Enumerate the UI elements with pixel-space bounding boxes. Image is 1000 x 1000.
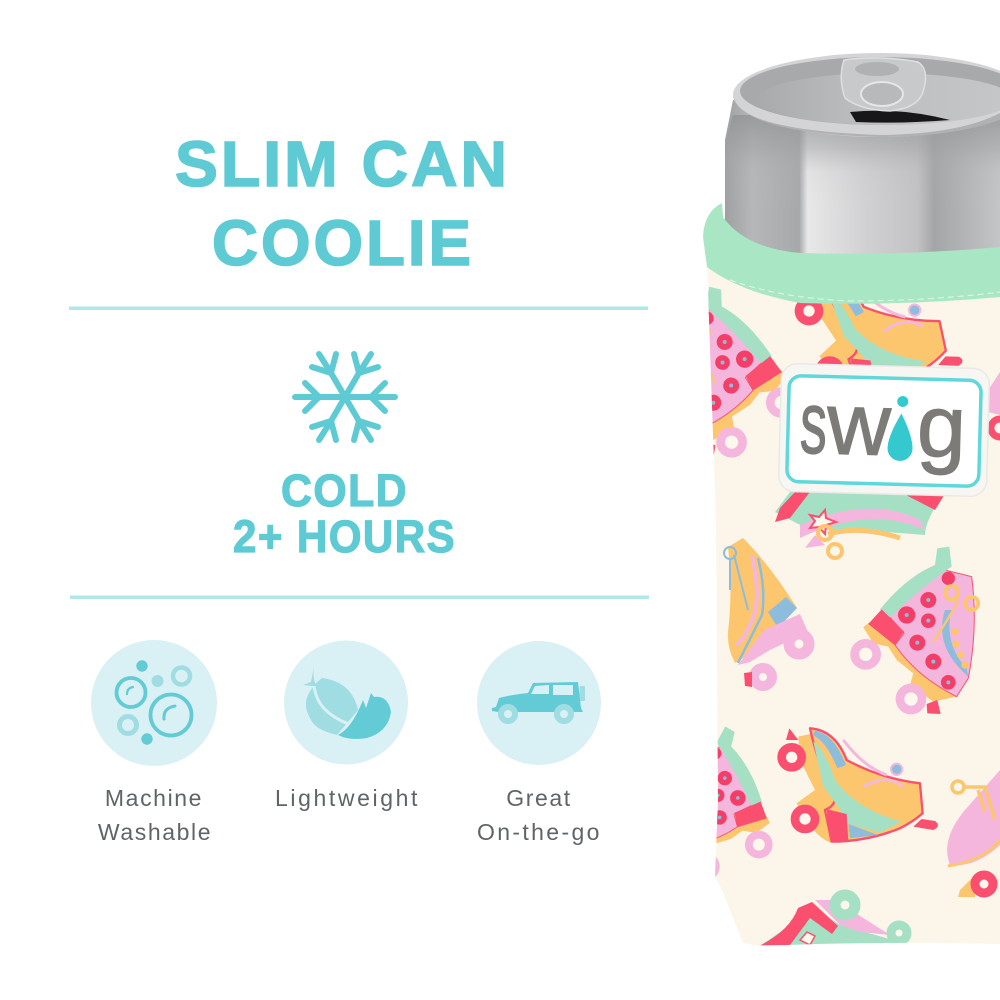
- title: SLIM CAN: [175, 128, 510, 200]
- logo wordmark: w ig: [825, 374, 967, 476]
- green collar: [703, 203, 1000, 304]
- skate: right flower: [855, 547, 978, 714]
- pull tab: [841, 58, 926, 111]
- cold duration text: COLD: [281, 465, 408, 516]
- feature: lightweight: [275, 640, 419, 811]
- logo drop: [887, 396, 914, 461]
- skate: left flower bottom: [715, 726, 773, 877]
- roller skate pattern: [708, 286, 1000, 946]
- cold duration text: [233, 465, 456, 562]
- label: Lightweight: [275, 785, 419, 811]
- swig logo patch: [778, 363, 990, 497]
- logo wordmark: s: [799, 373, 828, 472]
- icon: feather: [284, 640, 408, 764]
- skate: left yellow: [724, 538, 809, 687]
- skate: under patch rainbow: [775, 492, 945, 558]
- skate: right edge behind patch: [988, 372, 1000, 440]
- skate: right edge lower: [947, 765, 1000, 897]
- product: slim can with coolie: [703, 53, 1000, 946]
- title: COOLIE: [212, 207, 474, 279]
- label: Great: [506, 785, 572, 811]
- coolie sleeve: [707, 250, 1000, 946]
- collar stitching: [730, 280, 1000, 301]
- icon: bubbles: [91, 640, 217, 766]
- feature: machine washable: Washable: [98, 819, 212, 845]
- skate: left flower top: [708, 286, 782, 458]
- feature: great on-the-go: On-the-go: [477, 819, 601, 845]
- skate: bottom: [760, 895, 907, 946]
- skate: top red: [794, 302, 962, 366]
- feature: great on-the-go: [477, 641, 601, 845]
- icon: snowflake: [295, 354, 395, 440]
- cold duration text: 2+ HOURS: [233, 511, 456, 562]
- skate: center red: [782, 728, 938, 843]
- title: [175, 128, 510, 279]
- feature: machine washable: [91, 640, 217, 845]
- icon: jeep: [477, 641, 601, 765]
- label: Machine: [105, 785, 203, 811]
- can body: [725, 53, 1000, 262]
